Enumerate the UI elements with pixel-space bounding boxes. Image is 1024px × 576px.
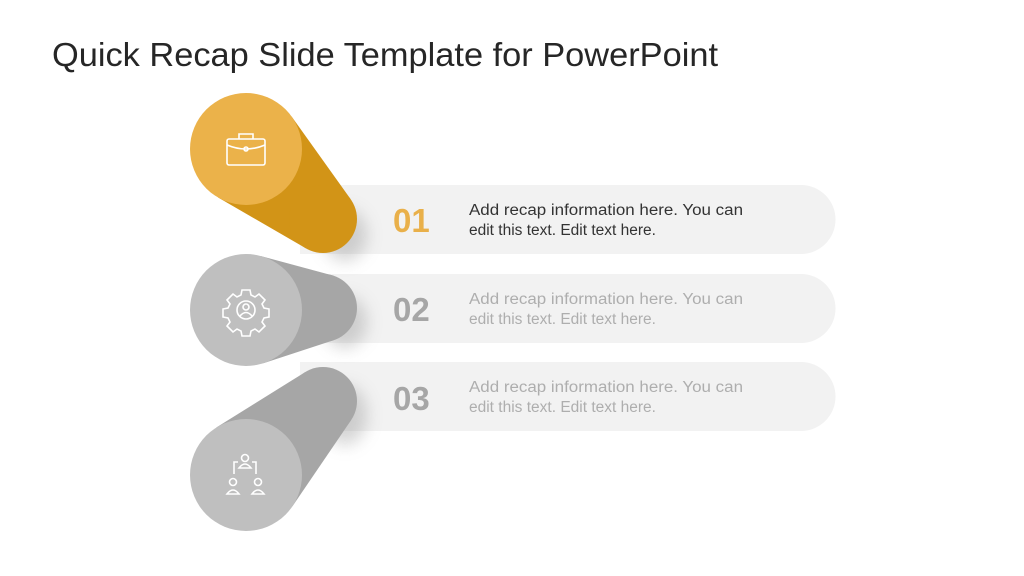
bar 2 [300,274,836,343]
number 02: 02 [393,291,430,328]
shadows [323,209,367,445]
text: edit this text. Edit text here. [469,222,656,239]
text: edit this text. Edit text here. [469,399,656,416]
text 2: Add recap information here. You can [469,291,743,308]
cylinder 3 (gray) [190,367,357,531]
icon: briefcase [227,134,265,165]
cylinder 1 (gold) [190,93,357,253]
icon: gear with person [223,290,269,336]
bar 3 [300,362,836,431]
text 1: Add recap information here. You can [469,202,743,219]
text: edit this text. Edit text here. [469,311,656,328]
bar 1 [300,185,836,254]
number 01: 01 [393,202,430,239]
title: Quick Recap Slide Template for PowerPoint [52,36,718,73]
icon: org chart [227,454,264,494]
text 3: Add recap information here. You can [469,379,743,396]
cylinder 2 (gray) [190,254,357,366]
number 03: 03 [393,380,430,417]
